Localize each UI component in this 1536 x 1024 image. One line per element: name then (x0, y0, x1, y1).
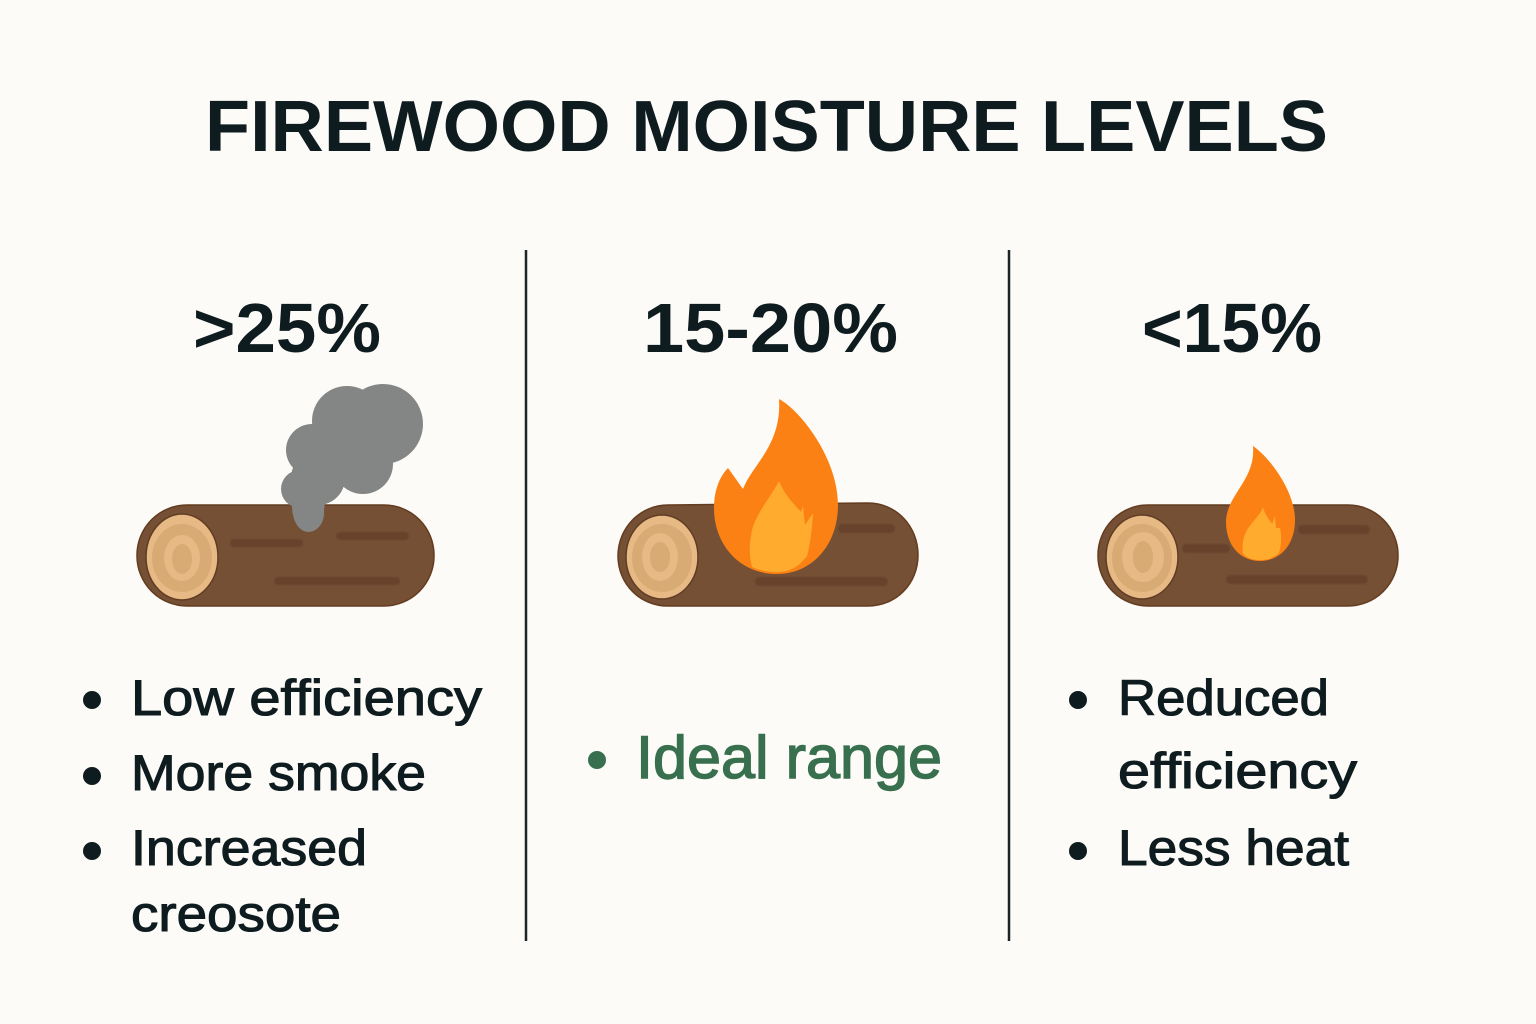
icon: smoking log (137, 384, 434, 606)
bullet list: drawbacks: Low efficiency (131, 670, 482, 726)
bullet list: dry wood effects: efficiency (1118, 743, 1357, 799)
icon: log with small flame (1098, 446, 1398, 606)
bullet list: drawbacks: More smoke (131, 745, 426, 801)
panel: 15 to 20 percent (588, 289, 942, 791)
title: FIREWOOD MOISTURE LEVELS (205, 87, 1328, 167)
bullet list: dry wood effects: Reduced (1118, 670, 1329, 726)
bullet list: dry wood effects: Less heat (1118, 820, 1349, 876)
panel: under 15 percent (1069, 289, 1398, 876)
icon: log with large flame (618, 399, 918, 606)
bullet list: drawbacks: Increased (131, 820, 367, 876)
bullet list: drawbacks: creosote (131, 886, 341, 942)
panel: over 25 percent (83, 289, 482, 942)
bullet list: drawbacks (83, 670, 482, 942)
heading: 15-20%: 15-20% (643, 289, 898, 367)
bullet: ideal range: Ideal range (636, 724, 942, 791)
bullet list: dry wood effects (1069, 670, 1357, 876)
heading: <15%: <15% (1142, 289, 1322, 367)
heading: >25%: >25% (193, 289, 381, 367)
